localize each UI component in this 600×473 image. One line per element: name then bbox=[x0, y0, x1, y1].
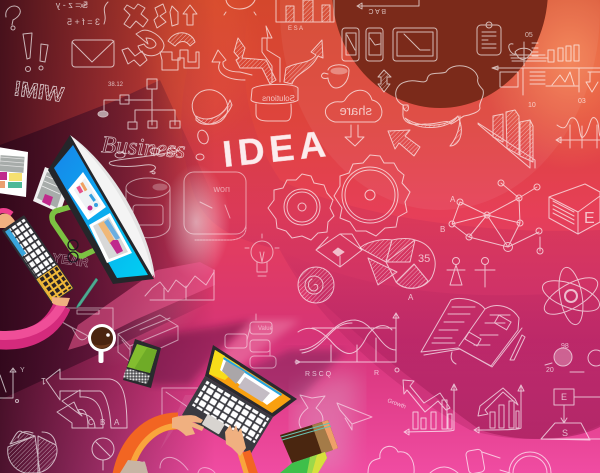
doodle: paper plane bbox=[337, 403, 372, 430]
keyboard bbox=[2, 215, 74, 304]
doodle: network diagram: B bbox=[440, 225, 445, 234]
doodle: mobile phones and tablet bbox=[342, 28, 437, 61]
doodle: axis chart top: B A C bbox=[368, 7, 386, 14]
doodle: books bbox=[118, 315, 178, 362]
doodle: hidden letters behind monitor: YEAR bbox=[52, 250, 90, 270]
doodle: dashboard chart top right: 05 bbox=[525, 32, 533, 39]
doodle: 3D circle bbox=[186, 83, 234, 160]
mirrored formulas: 3 = f + 5 bbox=[67, 17, 100, 27]
doodle: can bbox=[126, 178, 170, 238]
title: IDEA: IDEA bbox=[221, 123, 333, 175]
pencil bbox=[76, 278, 98, 308]
doodle: speech box with sketch text bbox=[184, 172, 246, 240]
doodle: wave chart right bbox=[556, 118, 600, 148]
doodle: flow block right bbox=[541, 389, 600, 440]
doodle: sketch printer left of coffee bbox=[62, 308, 113, 340]
doodles: top left symbols bbox=[6, 6, 114, 72]
doodle: bell curve chart bbox=[295, 313, 399, 378]
doodle: solutions pot with arrows: Solutions bbox=[262, 94, 295, 103]
green notebook bbox=[280, 452, 327, 473]
doodle: pie chart: 35 bbox=[418, 253, 430, 265]
icon: envelope bbox=[72, 40, 114, 67]
doodle: coffee cup bbox=[321, 65, 349, 88]
doodle: gears bbox=[268, 155, 410, 240]
diagonal shadows bbox=[0, 80, 360, 473]
doodle: flow block right: E bbox=[561, 392, 567, 402]
sleeve shadow bbox=[120, 460, 148, 473]
doodle: hatched arrow bbox=[388, 130, 420, 156]
monitor bbox=[48, 135, 155, 284]
doodle: pie chart lower left bbox=[8, 431, 57, 473]
doodle: lower left arrows: A bbox=[114, 418, 120, 427]
mirrored formulas: x² bbox=[80, 1, 87, 10]
printed paper second bbox=[33, 167, 72, 213]
doodle: lower left arrows: 1 bbox=[41, 376, 46, 386]
arms: orange sleeves bbox=[120, 421, 252, 473]
doodle: gender figures bbox=[447, 258, 495, 287]
doodle: axis chart top bbox=[357, 0, 419, 14]
doodle: no sign bbox=[92, 438, 114, 470]
doodle: clipboard bbox=[477, 22, 501, 55]
doodle: big cloud bbox=[396, 66, 483, 146]
doodle: open book and pen bbox=[421, 298, 525, 367]
doodle: small arrow bbox=[378, 70, 391, 92]
doodle: bell curve chart: R bbox=[374, 370, 379, 377]
mirrored formulas bbox=[55, 0, 108, 27]
doodle: share cloud: share bbox=[339, 103, 372, 118]
doodle: lower left arrows: C bbox=[88, 418, 94, 427]
flow chart: 38.12 bbox=[108, 82, 124, 88]
doodle: light bulb bbox=[245, 234, 279, 276]
doodle: percent circles: 98 bbox=[561, 343, 569, 350]
doodle: lower left arrows bbox=[41, 369, 127, 428]
doodle: monitor sketch centre bottom: YES bbox=[129, 459, 147, 469]
doodle: pie chart bbox=[360, 238, 435, 302]
doodle: lower left arrows: B bbox=[100, 418, 105, 427]
doodle: bottom cloud bbox=[368, 446, 414, 473]
arm: pink lower bbox=[0, 297, 70, 341]
doodle: alarm clock and bars bbox=[224, 0, 334, 32]
doodle: dashboard chart top right bbox=[492, 32, 600, 109]
doodle: dashboard chart top right: 10 bbox=[528, 102, 536, 109]
smartphone bbox=[123, 339, 161, 388]
coffee cup bbox=[88, 324, 116, 363]
flow chart bbox=[98, 79, 180, 158]
hatched arrows and crosses bbox=[122, 4, 199, 70]
doodle: bell curve chart: R S C Q bbox=[305, 371, 332, 378]
doodle: flow block right: S bbox=[562, 428, 568, 438]
hatched word: !MIW bbox=[12, 77, 65, 107]
doodle: percent circles bbox=[545, 343, 600, 374]
doodle: Business: Business bbox=[101, 132, 186, 164]
doodle: money sack bbox=[299, 395, 325, 432]
doodle: cube: E bbox=[584, 210, 595, 227]
doodle: tag boxes centre bottom: Value bbox=[258, 326, 274, 332]
doodle: dashboard chart top right: 03 bbox=[578, 98, 586, 105]
doodle: spiral bbox=[298, 267, 334, 303]
doodle: tag boxes centre bottom bbox=[225, 314, 276, 368]
mirrored formulas: 5 = z - y bbox=[55, 0, 88, 10]
doodle: network diagram bbox=[440, 180, 543, 254]
monitor stand bbox=[52, 207, 95, 262]
arm: left hand upper bbox=[0, 211, 21, 237]
doodle: growth bars bbox=[386, 380, 524, 435]
doodle: alarm clock and bars: E S A bbox=[288, 26, 303, 32]
doodle: network diagram: A bbox=[450, 195, 456, 204]
doodle: share cloud bbox=[325, 90, 382, 146]
doodle: atom bbox=[539, 266, 600, 326]
hands bbox=[172, 415, 246, 456]
printed paper top bbox=[0, 147, 28, 197]
laptop bbox=[182, 345, 297, 455]
doodle: cube bbox=[549, 184, 600, 234]
doodle: open box bbox=[316, 234, 362, 267]
doodle: 3D bar chart bbox=[478, 110, 535, 168]
doodle: lower left axis bbox=[0, 367, 25, 402]
doodle: bottom devices bbox=[430, 449, 551, 473]
doodle: chart under monitor bbox=[145, 270, 214, 300]
wallet book bbox=[280, 420, 338, 463]
doodle: monitor sketch centre bottom bbox=[129, 388, 215, 473]
doodle: percent circles: 20 bbox=[546, 367, 554, 374]
doodle: pie chart: A bbox=[408, 293, 414, 302]
doodle: growth bars: Growth bbox=[386, 398, 407, 410]
doodle: speech box with sketch text: now bbox=[213, 184, 230, 194]
doodle: solutions pot with arrows bbox=[212, 26, 323, 121]
doodle: lower left axis: Y bbox=[20, 367, 25, 374]
